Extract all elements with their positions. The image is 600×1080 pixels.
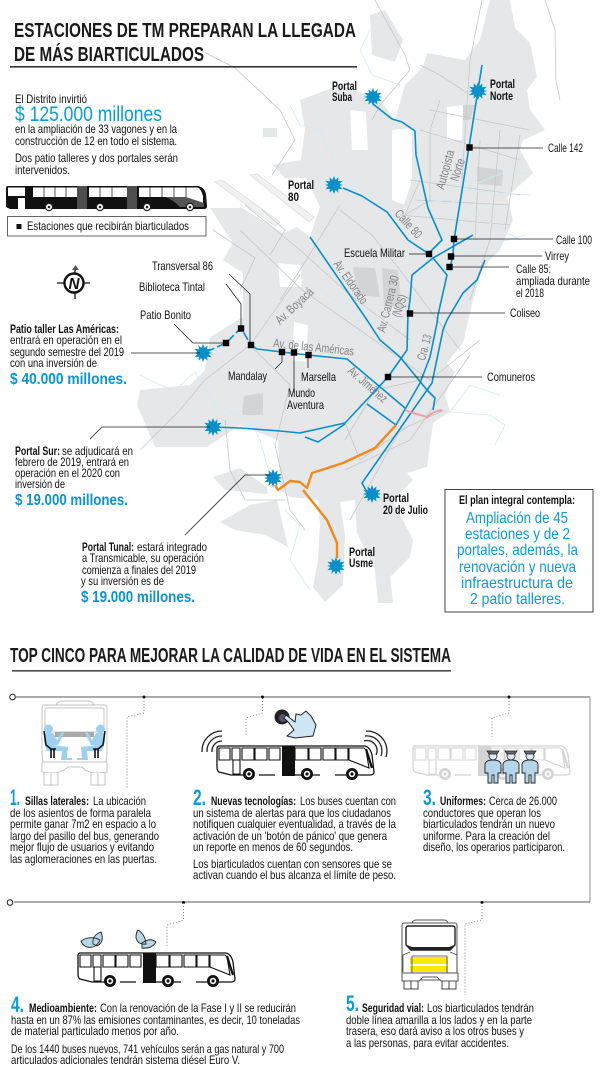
map labels: Portal bbox=[490, 77, 515, 91]
map labels: Portal bbox=[332, 79, 357, 93]
item 2: nuevas tecnologías: un sistema de alertas para que los ciudadanos bbox=[193, 806, 391, 820]
item 4: medioambiente: Medioambiente: bbox=[29, 1001, 97, 1015]
title: DE MÁS BIARTICULADOS bbox=[14, 43, 204, 66]
callout: Portal Tunal bbox=[81, 540, 207, 606]
item 5: seguridad vial: Los biarticulados tendrán bbox=[427, 1001, 534, 1015]
investment text block: Dos patio talleres y dos portales serán bbox=[15, 151, 178, 165]
map labels bbox=[139, 77, 592, 570]
item 4: medioambiente: 4. bbox=[11, 992, 24, 1017]
station markers and leader lines bbox=[90, 144, 553, 535]
map labels: Transversal 86 bbox=[152, 259, 213, 273]
legend bbox=[8, 216, 206, 236]
item 4: medioambiente: De los 1440 buses nuevos, 741 vehículos serán a gas natural y 700 bbox=[11, 1042, 284, 1056]
callout: Portal Sur: febrero de 2019, entrará en bbox=[15, 455, 129, 469]
item 2: nuevas tecnologías: 2. bbox=[193, 785, 206, 810]
map labels: Portal bbox=[349, 545, 375, 559]
map labels: Biblioteca Tintal bbox=[139, 280, 205, 294]
Transmilenio lines bbox=[206, 65, 485, 492]
icon: north compass bbox=[57, 265, 90, 299]
icon: environment bus with leaves bbox=[78, 930, 235, 987]
icon: black articulated bus bbox=[6, 186, 207, 211]
callout box: plan integral: estaciones y de 2 bbox=[465, 526, 570, 543]
item 5: seguridad vial: doble línea amarilla a los lados y en la parte bbox=[346, 1013, 532, 1027]
item 3: uniformes: uniforme. Para la creación del bbox=[423, 829, 550, 843]
icon: technology bus with panic button bbox=[202, 710, 387, 780]
callout: Portal Sur bbox=[15, 444, 133, 509]
callout: Portal Sur: Portal Sur: bbox=[15, 444, 60, 458]
portal markers bbox=[194, 82, 487, 575]
callout: Patio taller Las Américas: segundo semestre del 2019 bbox=[10, 345, 124, 359]
item 2: nuevas tecnologías: un reporte en menos de 60 segundos. bbox=[193, 840, 353, 854]
legend: Estaciones que recibirán biarticulados bbox=[27, 219, 189, 233]
road labels: Av. Boyacá bbox=[272, 285, 316, 327]
callout: Patio taller Las Américas: entrará en operación en el bbox=[10, 333, 122, 347]
item 2: nuevas tecnologías: Nuevas tecnologías: bbox=[211, 794, 296, 808]
item 2: nuevas tecnologías bbox=[193, 785, 396, 882]
investment text block: en la ampliación de 33 vagones y en la bbox=[15, 122, 177, 136]
road labels: Autopista bbox=[433, 148, 457, 191]
road labels: Av. de las Américas bbox=[273, 336, 355, 358]
map labels: Patio Bonito bbox=[140, 308, 191, 322]
item 5: seguridad vial: Seguridad vial: bbox=[362, 1001, 424, 1015]
map labels: Usme bbox=[349, 556, 373, 570]
callout: Portal Tunal: comienza a finales del 2019 bbox=[82, 563, 196, 577]
map labels: Calle 142 bbox=[548, 141, 583, 155]
urban area bbox=[137, 0, 545, 603]
callout: Portal Tunal: estará integrado bbox=[137, 540, 207, 554]
map labels: Suba bbox=[332, 90, 352, 104]
map labels: Portal bbox=[288, 178, 314, 192]
map labels: Coliseo bbox=[510, 306, 540, 320]
road labels: Calle 80 bbox=[392, 207, 425, 241]
map labels: Comuneros bbox=[487, 370, 535, 384]
item 1: sillas laterales: permite ganar 7m2 en espacio a lo bbox=[10, 817, 156, 831]
map labels: Mundo bbox=[288, 386, 315, 400]
callout: Portal Tunal: y su inversión es de bbox=[81, 574, 164, 588]
item 3: uniformes: conductores que operan los bbox=[423, 806, 541, 820]
map labels: Virrey bbox=[545, 249, 569, 263]
item 4: medioambiente: articulados adicionales tendrán sistema diésel Euro V. bbox=[11, 1053, 240, 1067]
map labels: Escuela Militar bbox=[344, 246, 405, 260]
icon: uniforms bbox=[413, 746, 570, 783]
callout box: plan integral: 2 patio talleres. bbox=[470, 591, 565, 608]
item 5: seguridad vial: a las personas, para evitar accidentes. bbox=[346, 1036, 509, 1050]
callout box: plan integral: infraestructura de bbox=[461, 575, 573, 592]
road labels bbox=[272, 148, 468, 406]
item 2: nuevas tecnologías: Los buses cuentan con bbox=[300, 794, 396, 808]
item 2: nuevas tecnologías: Los biarticulados cuentan con sensores que se bbox=[193, 857, 392, 871]
callout: Portal Sur: se adjudicará en bbox=[62, 444, 133, 458]
map labels: Mandalay bbox=[228, 369, 267, 383]
item 1: sillas laterales: las aglomeraciones en las puertas. bbox=[10, 852, 157, 866]
road labels: Av. Carrera 30 bbox=[374, 274, 402, 334]
Orange and pink lines bbox=[275, 410, 442, 558]
map labels: Calle 85: bbox=[516, 262, 551, 276]
item 1: sillas laterales: largo del pasillo del bus, generando bbox=[10, 829, 159, 843]
icon: side seats bbox=[42, 701, 107, 785]
map labels: el 2018 bbox=[516, 286, 544, 300]
item 3: uniformes: Cerca de 26.000 bbox=[489, 794, 557, 808]
item 3: uniformes bbox=[423, 785, 565, 854]
callout: Portal Tunal: a Transmicable, su operación bbox=[82, 551, 204, 565]
item 1: sillas laterales: de los asientos de forma paralela bbox=[10, 806, 151, 820]
map labels: Marsella bbox=[301, 370, 336, 384]
callout box: plan integral: Ampliación de 45 bbox=[466, 510, 568, 527]
callout: Portal Sur: operación en el 2020 con bbox=[15, 466, 120, 480]
callout: Portal Sur: $ 19.000 millones. bbox=[15, 492, 128, 509]
callout: Patio taller Las Américas: Patio taller Las Américas: bbox=[10, 322, 119, 336]
investment text block: El Distrito invirtió bbox=[15, 92, 87, 106]
item 3: uniformes: diseño, los operarios participaron. bbox=[423, 840, 565, 854]
item 2: nuevas tecnologías: notifiquen cualquier eventualidad, a través de la bbox=[193, 817, 396, 831]
item 5: seguridad vial bbox=[346, 991, 534, 1050]
item 4: medioambiente: hasta en un 87% las emisiones contaminantes, es decir, 10 toneladas bbox=[11, 1013, 300, 1027]
map labels: 80 bbox=[288, 190, 299, 204]
investment text block: construcción de 12 en todo el sistema. bbox=[15, 134, 177, 148]
callout: Patio taller Las Américas bbox=[10, 322, 127, 388]
map labels: Portal bbox=[383, 491, 409, 505]
map labels: Aventura bbox=[287, 398, 324, 412]
item 2: nuevas tecnologías: activación de un 'botón de pánico' que genera bbox=[193, 829, 387, 843]
callout: Patio taller Las Américas: con una inversión de bbox=[10, 356, 97, 370]
item 1: sillas laterales: mejor flujo de usuarios y evitando bbox=[10, 840, 154, 854]
item 5: seguridad vial: 5. bbox=[346, 991, 359, 1016]
roads bbox=[140, 0, 560, 530]
item 3: uniformes: 3. bbox=[423, 785, 436, 810]
icon: north compass: N bbox=[68, 276, 80, 293]
title: ESTACIONES DE TM PREPARAN LA LLEGADA bbox=[14, 19, 356, 42]
callout: Portal Tunal: $ 19.000 millones. bbox=[81, 589, 195, 606]
item 3: uniformes: biarticulados tendrán un nuevo bbox=[423, 817, 555, 831]
item 2: nuevas tecnologías: activan cuando el bus alcanza el límite de peso. bbox=[193, 868, 396, 882]
icon: rear of bus with yellow stripes bbox=[402, 920, 458, 989]
investment text block: intervenidos. bbox=[15, 163, 70, 177]
map of Bogotá bbox=[90, 0, 560, 603]
item 1: sillas laterales: 1. bbox=[10, 785, 20, 810]
item 5: seguridad vial: trasera, eso dará aviso a los otros buses y bbox=[346, 1024, 524, 1038]
callout box: plan integral: portales, además, la bbox=[457, 542, 578, 559]
callout box: plan integral bbox=[445, 490, 593, 612]
road labels: Av. Eldorado bbox=[331, 258, 371, 307]
road labels: Av. Jiménez bbox=[345, 364, 390, 406]
item 1: sillas laterales: La ubicación bbox=[93, 794, 146, 808]
rivers bbox=[140, 30, 530, 590]
item 1: sillas laterales: Sillas laterales: bbox=[25, 794, 89, 808]
road labels: Norte bbox=[448, 157, 468, 183]
callout: Portal Sur: inversión de bbox=[15, 477, 65, 491]
road labels: Cra. 13 bbox=[414, 333, 435, 362]
item 1: sillas laterales bbox=[10, 785, 159, 866]
investment text block: $ 125.000 millones bbox=[15, 103, 162, 126]
callout: Patio taller Las Américas: $ 40.000 millones. bbox=[10, 371, 127, 388]
map labels: 20 de Julio bbox=[383, 503, 428, 517]
map labels: Norte bbox=[490, 89, 513, 103]
callout box: plan integral: renovación y nueva bbox=[459, 559, 576, 576]
item 4: medioambiente: Con la renovación de la Fase I y II se reducirán bbox=[100, 1001, 296, 1015]
item 3: uniformes: Uniformes: bbox=[440, 794, 486, 808]
item 4: medioambiente bbox=[11, 992, 300, 1067]
title bbox=[10, 19, 357, 68]
timeline frame bbox=[7, 694, 590, 995]
callout: Portal Tunal: Portal Tunal: bbox=[82, 540, 134, 554]
item 4: medioambiente: de material particulado menos por año. bbox=[11, 1024, 179, 1038]
road labels: (NQS) bbox=[390, 293, 410, 319]
investment text block bbox=[15, 92, 178, 177]
